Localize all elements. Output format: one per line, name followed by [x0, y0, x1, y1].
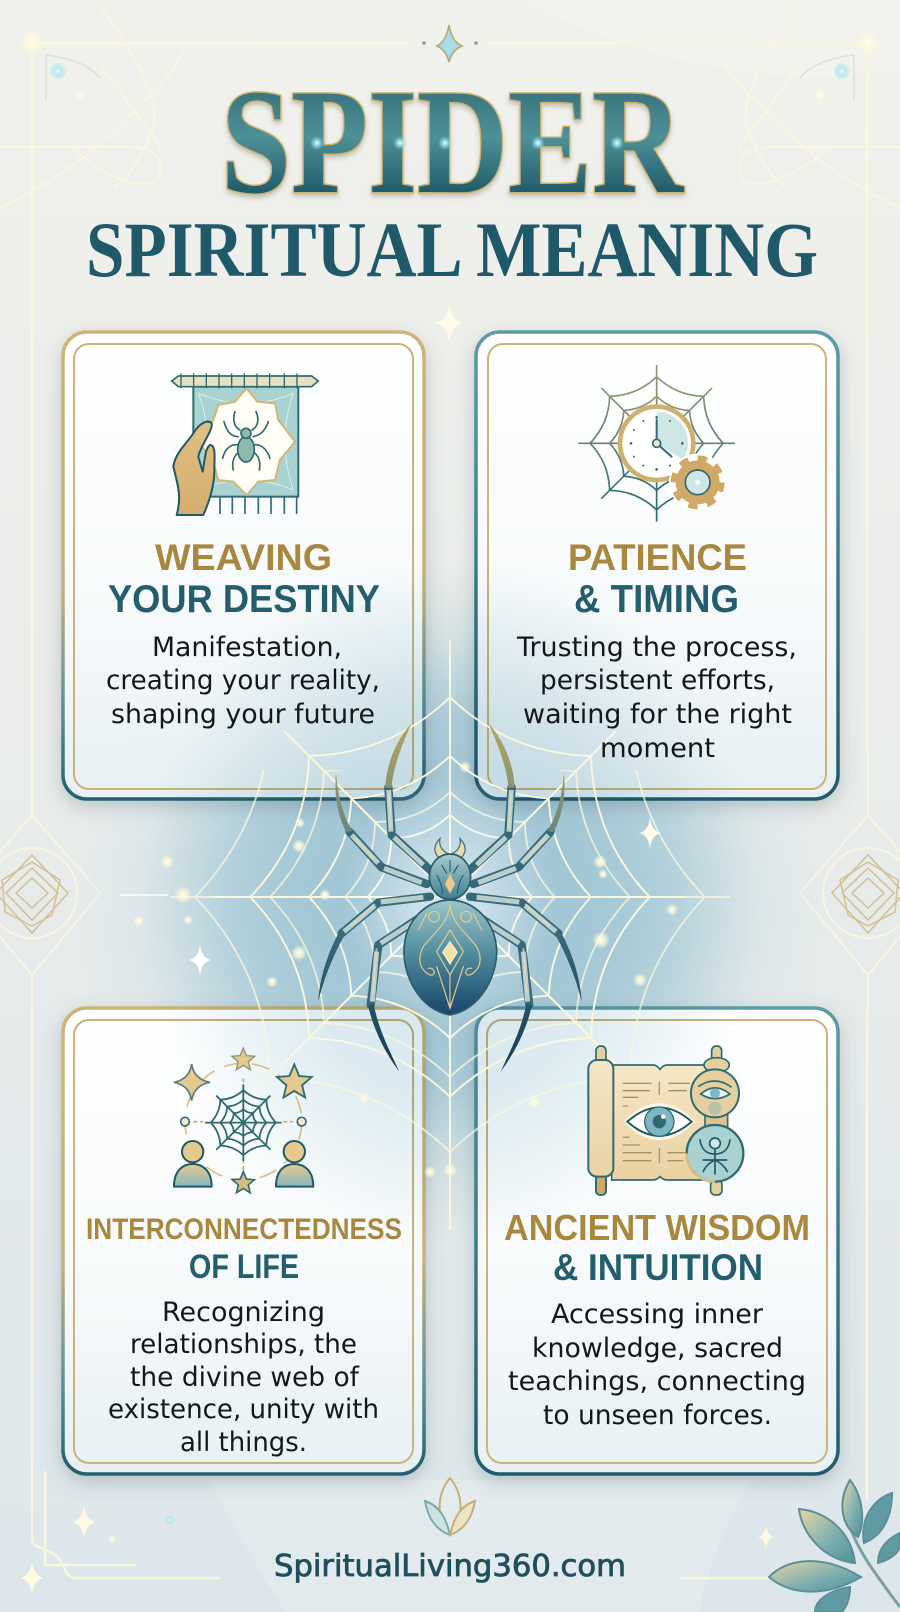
heading: WEAVING [155, 537, 332, 578]
heading line two: OF LIFE [189, 1248, 299, 1286]
heading line two: & INTUITION [553, 1247, 763, 1288]
description: all things. [180, 1427, 307, 1458]
description: persistent efforts, [540, 665, 775, 696]
spider legs right [463, 723, 582, 1072]
description [508, 1299, 806, 1431]
central spider illustration [318, 723, 582, 1072]
frame: patience and timing [476, 332, 838, 799]
title: SPIDER: SPIDER [221, 59, 684, 225]
icon: web with clock and gear [578, 365, 735, 522]
spider halo [340, 775, 560, 1025]
left mandala ornament [0, 750, 100, 1010]
card content: patience and timing [516, 365, 797, 764]
description [108, 1297, 379, 1458]
description: Accessing inner [551, 1299, 763, 1330]
heading line two: YOUR DESTINY [108, 578, 380, 621]
description: waiting for the right [523, 699, 792, 730]
icon: scroll with eye and symbols [588, 1046, 743, 1195]
frame: interconnectedness of life [63, 1008, 424, 1474]
top diamond ornament [422, 25, 478, 62]
description: knowledge, sacred [532, 1333, 783, 1364]
spider abdomen [404, 900, 497, 1015]
description [516, 632, 797, 764]
description: relationships, the [130, 1329, 357, 1360]
top sparkle [435, 303, 463, 343]
description: moment [600, 733, 715, 764]
description: Trusting the process, [516, 632, 797, 663]
blue glow behind cards [70, 600, 830, 1200]
card content: ancient wisdom and intuition [504, 1046, 810, 1431]
heading: ANCIENT WISDOM [504, 1207, 810, 1248]
right mandala ornament [800, 750, 900, 1010]
description: Recognizing [162, 1297, 325, 1328]
description: the divine web of [130, 1362, 360, 1393]
heading line two: & TIMING [574, 578, 739, 621]
frame: weaving your destiny [63, 332, 424, 799]
spider fangs [435, 839, 465, 857]
spider web [170, 640, 730, 1230]
description: to unseen forces. [543, 1400, 772, 1431]
card frames [63, 332, 838, 1474]
card content: interconnectedness of life [86, 1048, 402, 1458]
subtitle: spiritual meaning: SPIRITUAL MEANING [86, 206, 818, 293]
top corner ornament left [0, 7, 184, 207]
sparkles and particles [20, 761, 774, 1595]
card content: weaving your destiny [106, 373, 380, 730]
footer leaf ornament [425, 1478, 475, 1535]
central blue glow over cards [140, 560, 760, 1240]
spider cephalothorax [429, 854, 471, 899]
description [106, 632, 380, 730]
heading: INTERCONNECTEDNESS [86, 1213, 402, 1246]
description: Manifestation, [152, 632, 342, 663]
icon: tapestry with spider and hand [172, 373, 318, 515]
frame: ancient wisdom and intuition [476, 1008, 838, 1474]
spider legs left [318, 723, 437, 1072]
description: teachings, connecting [508, 1366, 806, 1397]
icon: web, stars and people [174, 1048, 313, 1193]
description: existence, unity with [108, 1394, 379, 1425]
footer website: SpiritualLiving360.com [274, 1549, 626, 1584]
description: shaping your future [111, 699, 375, 730]
description: creating your reality, [106, 665, 380, 696]
heading: PATIENCE [568, 537, 747, 578]
botanical leaves bottom right [769, 1480, 900, 1612]
top corner ornament right [716, 7, 900, 207]
